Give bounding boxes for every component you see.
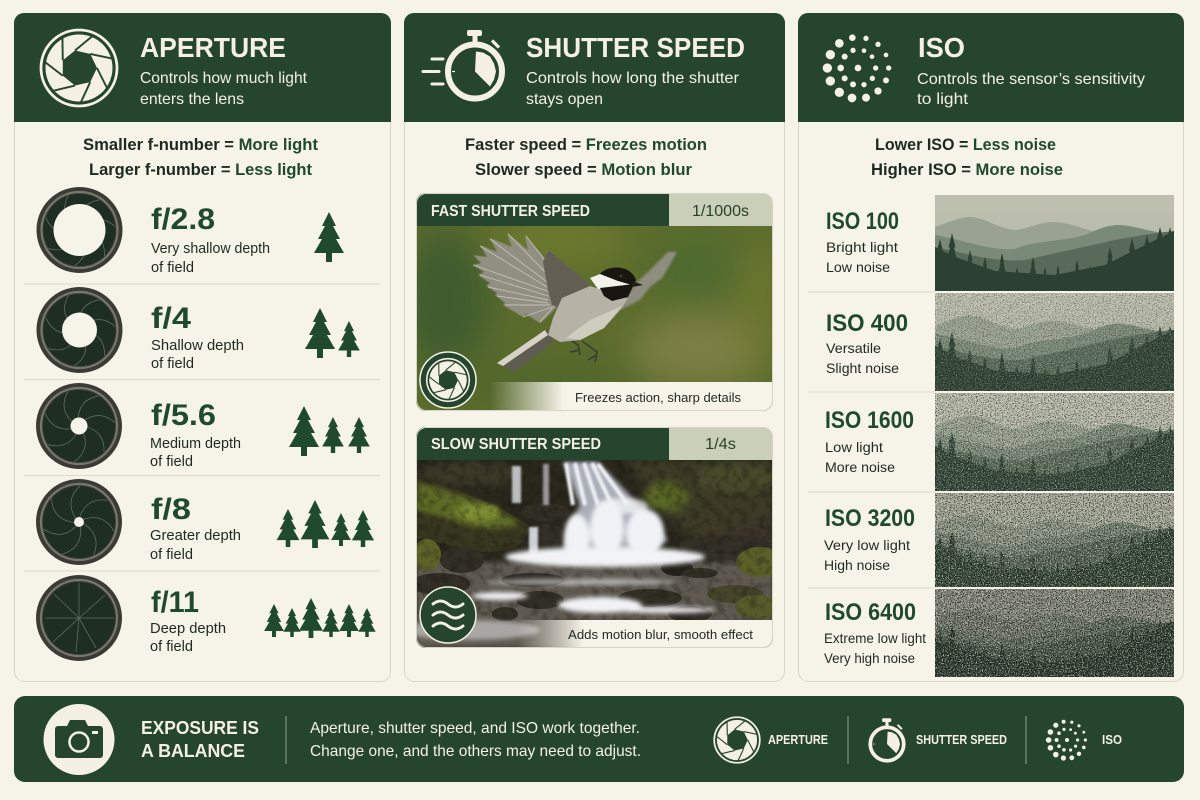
- description f/2.8: Very shallow depth: [151, 241, 270, 257]
- slow title: SLOW SHUTTER SPEED: [431, 436, 601, 453]
- heading: ISO: ISO: [918, 32, 965, 63]
- label f/11: f/11: [151, 586, 199, 619]
- description f/11: Deep depth: [150, 621, 226, 637]
- pool: [416, 562, 773, 648]
- tree icons: [277, 500, 374, 548]
- label ISO 6400: ISO 6400: [825, 599, 916, 626]
- label ISO 3200: ISO 3200: [825, 505, 915, 532]
- ISO rule: Higher ISO = More noise: [871, 160, 1063, 179]
- aperture description: Controls how much light: [140, 70, 308, 87]
- description f/8: Greater depth: [150, 528, 241, 544]
- waterfall photo: [400, 460, 784, 648]
- bird photo: [416, 226, 773, 411]
- description f/2.8: of field: [151, 260, 194, 276]
- lens f/11: [36, 575, 122, 661]
- row: ISO 3200: [824, 493, 1179, 587]
- icon: camera: [44, 704, 114, 775]
- slow caption bar: [517, 620, 773, 648]
- card: fast shutter speed: [400, 193, 782, 411]
- near wing: [473, 233, 558, 324]
- aperture rule: Larger f-number = Less light: [89, 160, 312, 179]
- label ISO 1600: ISO 1600: [825, 407, 914, 434]
- label f/2.8: f/2.8: [151, 203, 215, 236]
- description ISO 1600: Low light: [825, 439, 883, 455]
- icon: ISO dots: [823, 34, 891, 102]
- panel: aperture: [14, 13, 391, 682]
- panel: shutter speed: [400, 13, 785, 682]
- shutter description: stays open: [526, 91, 603, 108]
- aperture header band: [14, 13, 391, 122]
- fast caption: Freezes action, sharp details: [575, 390, 741, 405]
- tail: [503, 328, 553, 372]
- label f/4: f/4: [151, 302, 191, 335]
- label f/8: f/8: [151, 493, 191, 526]
- footer heading: A BALANCE: [141, 740, 245, 761]
- description ISO 400: Slight noise: [826, 360, 899, 376]
- slow header: dark: [416, 427, 669, 460]
- panel: ISO: [798, 13, 1184, 682]
- tree icons: [305, 308, 360, 358]
- label f/5.6: f/5.6: [151, 399, 216, 432]
- falling water: [512, 464, 549, 558]
- icon: aperture: [41, 30, 117, 106]
- row: ISO 6400: [824, 589, 1179, 677]
- cliffs: [420, 460, 775, 565]
- description ISO 100: Low noise: [826, 259, 890, 275]
- slow header: speed value: [669, 427, 773, 460]
- lens f/5.6: [36, 383, 122, 469]
- moss boulder: [416, 478, 528, 552]
- slow value: 1/4s: [705, 436, 736, 453]
- card: slow shutter speed: [400, 427, 784, 648]
- photo ISO 6400: [933, 589, 1179, 677]
- description f/4: of field: [151, 356, 194, 372]
- footer message: Change one, and the others may need to adjust.: [310, 743, 641, 760]
- tree icon: [314, 212, 344, 262]
- row: f/2.8: [36, 187, 344, 276]
- head: [599, 268, 636, 284]
- row: ISO 1600: [825, 393, 1179, 491]
- body: [548, 286, 628, 342]
- legend: ISO: [1046, 720, 1122, 761]
- icon: stopwatch: [423, 30, 502, 98]
- label ISO 400: ISO 400: [826, 310, 908, 337]
- description ISO 6400: Very high noise: [824, 650, 915, 666]
- description ISO 1600: More noise: [825, 459, 895, 475]
- footer message: Aperture, shutter speed, and ISO work together.: [310, 720, 640, 737]
- lens f/8: [35, 478, 125, 568]
- heading: aperture: APERTURE: [140, 32, 286, 63]
- ISO description: to light: [917, 91, 969, 108]
- shutter rule: [465, 135, 707, 179]
- row: f/5.6: [36, 383, 370, 470]
- shutter header band: [404, 13, 785, 122]
- lens f/2.8: [36, 187, 122, 273]
- ISO rule: [871, 135, 1063, 179]
- tree icons: [264, 598, 376, 638]
- ISO rule: Lower ISO = Less noise: [875, 135, 1056, 154]
- legend: aperture: APERTURE: [768, 732, 828, 747]
- shutter rule: Faster speed = Freezes motion: [465, 135, 707, 154]
- footer heading: EXPOSURE IS: [141, 717, 259, 738]
- photo ISO 3200: [933, 493, 1179, 587]
- lens f/4: [36, 287, 122, 373]
- slow caption: Adds motion blur, smooth effect: [568, 627, 753, 642]
- row: ISO 400: [826, 293, 1179, 391]
- icon: water badge: [420, 587, 476, 643]
- fast title: FAST SHUTTER SPEED: [431, 203, 590, 220]
- far wing: [620, 252, 677, 310]
- description f/5.6: of field: [150, 454, 193, 470]
- description ISO 3200: High noise: [824, 557, 890, 573]
- row: f/8: [35, 478, 374, 568]
- description ISO 400: Versatile: [826, 340, 881, 356]
- description ISO 100: Bright light: [826, 239, 898, 255]
- description f/8: of field: [150, 547, 193, 563]
- footer message: [310, 720, 641, 760]
- fast value: 1/1000s: [692, 203, 749, 220]
- photo ISO 400: [933, 293, 1179, 391]
- photo ISO 1600: [933, 393, 1179, 491]
- fast header: dark: [416, 193, 669, 226]
- description f/11: of field: [150, 639, 193, 655]
- legend: shutter speed: [870, 718, 1007, 761]
- aperture description: enters the lens: [140, 91, 244, 108]
- legend: ISO: ISO: [1102, 732, 1122, 747]
- description f/5.6: Medium depth: [150, 436, 241, 452]
- footer banner: [14, 696, 1184, 782]
- rocks: [410, 503, 784, 622]
- texture: [416, 460, 773, 620]
- row: ISO 100: [826, 195, 1179, 291]
- legend: aperture: [714, 717, 828, 763]
- row: f/11: [36, 575, 376, 661]
- label ISO 100: ISO 100: [826, 208, 899, 235]
- tree icons: [289, 406, 370, 456]
- shutter description: Controls how long the shutter: [526, 70, 740, 87]
- ISO description: Controls the sensor’s sensitivity: [917, 71, 1145, 88]
- photo ISO 100: [933, 195, 1179, 291]
- icon: aperture badge: [420, 352, 476, 408]
- ISO header band: [798, 13, 1184, 122]
- description f/4: Shallow depth: [151, 338, 244, 354]
- legs: [570, 340, 598, 362]
- description ISO 3200: Very low light: [824, 537, 910, 553]
- shutter rule: Slower speed = Motion blur: [475, 160, 692, 179]
- aperture rule: [83, 135, 318, 179]
- aperture rule: Smaller f-number = More light: [83, 135, 318, 154]
- row: f/4: [36, 287, 360, 373]
- fast caption bar: [490, 382, 773, 411]
- fast header: speed value: [669, 193, 773, 226]
- legend: shutter speed: SHUTTER SPEED: [916, 732, 1007, 747]
- description ISO 6400: Extreme low light: [824, 630, 926, 646]
- heading: shutter speed: SHUTTER SPEED: [526, 32, 745, 63]
